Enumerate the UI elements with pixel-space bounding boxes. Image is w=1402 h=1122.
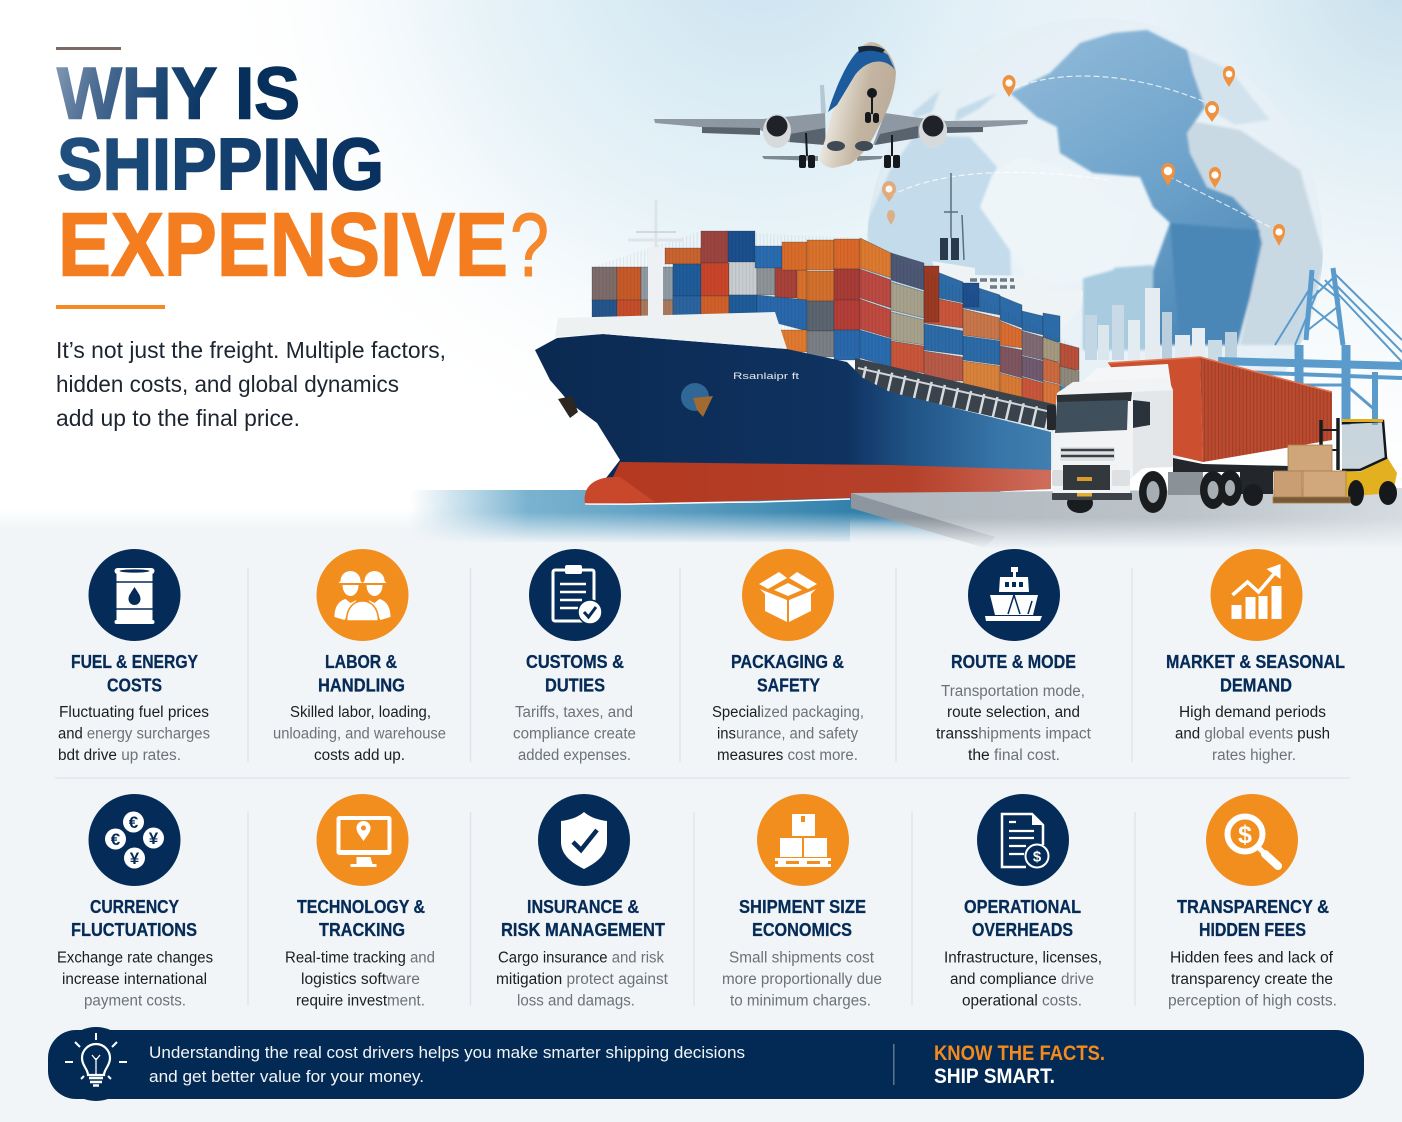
- icon: boxes on pallet: [757, 794, 849, 886]
- heading: [71, 896, 197, 940]
- engines: [763, 114, 947, 148]
- description: transparency create the: [1171, 971, 1333, 988]
- card: labor and handling: [273, 549, 446, 764]
- icon: open box: [742, 549, 834, 641]
- description: compliance create: [513, 726, 636, 742]
- footer message: Understanding the real cost drivers helps you make smarter shipping decisions: [149, 1043, 745, 1062]
- icon: two workers: [316, 549, 408, 641]
- heading: HANDLING: [318, 674, 405, 696]
- heading: [526, 651, 624, 696]
- icon: magnifier with dollar: [1206, 794, 1298, 886]
- title line: why is: WHY IS: [57, 54, 300, 134]
- wings: [654, 113, 1028, 145]
- footer call to action: [934, 1042, 1105, 1088]
- description: [944, 950, 1102, 1010]
- landing gear: [799, 88, 900, 168]
- illustration: forklift with boxes: [1273, 418, 1397, 506]
- container stacks, forward section: [592, 231, 860, 360]
- footer call to action: KNOW THE FACTS.: [934, 1042, 1105, 1065]
- description: [58, 704, 210, 764]
- heading: [71, 651, 199, 696]
- intro text: add up to the final price.: [56, 405, 300, 431]
- hull: [535, 334, 1051, 505]
- icon: currency coins: [88, 794, 180, 886]
- heading: SAFETY: [757, 674, 821, 696]
- shipping container trailer: [1108, 357, 1332, 462]
- title: [57, 54, 549, 296]
- heading: LABOR &: [325, 651, 397, 672]
- description: [1175, 704, 1330, 764]
- illustration: port crane: [1218, 268, 1402, 425]
- heading: FUEL & ENERGY: [71, 651, 199, 672]
- description: the final cost.: [968, 747, 1060, 764]
- container stacks, aft section: [860, 238, 1079, 412]
- description: [1168, 950, 1337, 1010]
- description: operational costs.: [962, 992, 1082, 1010]
- footer banner: [48, 1027, 1364, 1101]
- route lines: [890, 76, 1280, 232]
- top accent line: [56, 47, 121, 50]
- heading: TRANSPARENCY &: [1177, 896, 1329, 917]
- mast: [628, 200, 683, 337]
- description: rates higher.: [1212, 747, 1296, 764]
- card: insurance and risk management: [496, 794, 669, 1010]
- description: loss and damags.: [517, 992, 635, 1010]
- description: and global events push: [1175, 726, 1330, 742]
- title line: expensive: EXPENSIVE: [58, 196, 508, 296]
- heading: [1166, 651, 1345, 696]
- description: Exchange rate changes: [57, 950, 213, 966]
- heading: CUSTOMS &: [526, 651, 624, 672]
- ship name: Rsanlaipr ft: [733, 371, 799, 382]
- description: more proportionally due: [722, 971, 882, 988]
- description: Tariffs, taxes, and: [515, 704, 633, 721]
- description: Hidden fees and lack of: [1170, 950, 1334, 966]
- wheels: [1067, 470, 1263, 513]
- description: Skilled labor, loading,: [290, 704, 431, 721]
- heading: [1177, 896, 1329, 940]
- icon: currency coins: €: [129, 813, 139, 832]
- description: [513, 704, 636, 764]
- intro text: It’s not just the freight. Multiple factors,: [56, 337, 446, 363]
- heading: [964, 896, 1081, 940]
- description: increase international: [62, 971, 207, 988]
- chassis: [1168, 458, 1290, 495]
- heading: [731, 651, 844, 696]
- heading: COSTS: [107, 674, 162, 696]
- description: added expenses.: [518, 747, 631, 764]
- icon: monitor with pin: [316, 794, 408, 886]
- description: unloading, and warehouse: [273, 726, 446, 742]
- description: Real-time tracking and: [285, 950, 435, 966]
- card: fuel and energy costs: [58, 549, 210, 764]
- tailplane: [762, 156, 883, 161]
- description: mitigation protect against: [496, 971, 669, 988]
- description: payment costs.: [84, 992, 186, 1010]
- anchor and hawse: [558, 383, 713, 418]
- heading: TECHNOLOGY &: [297, 896, 425, 917]
- heading: DEMAND: [1220, 674, 1292, 696]
- heading: MARKET & SEASONAL: [1166, 651, 1345, 672]
- illustration: truck with container: [1047, 357, 1332, 513]
- description: Specialized packaging,: [712, 704, 864, 721]
- illustration: city skyline: [1085, 288, 1237, 360]
- icon: clipboard with check: [529, 549, 621, 641]
- deck pillars: [855, 358, 1079, 432]
- icon: light bulb: [59, 1027, 133, 1101]
- description: [712, 704, 864, 764]
- heading: [739, 896, 866, 940]
- description: High demand periods: [1179, 704, 1326, 721]
- icon: oil barrel: [88, 549, 180, 641]
- description: costs add up.: [314, 747, 405, 764]
- illustration: quay: [850, 488, 1402, 549]
- description: and energy surcharges: [58, 726, 210, 742]
- description: [936, 683, 1092, 764]
- heading: DUTIES: [545, 674, 605, 696]
- card: technology and tracking: [285, 794, 435, 1010]
- icon: document with dollar: [977, 794, 1069, 886]
- description: transshipments impact: [936, 726, 1092, 742]
- heading: [297, 896, 425, 940]
- description: perception of high costs.: [1168, 992, 1337, 1010]
- orange accent bar: [56, 305, 165, 309]
- icon: shield with check: [538, 794, 630, 886]
- description: [496, 950, 669, 1010]
- description: bdt drive up rates.: [58, 747, 181, 764]
- title question mark: ?: [510, 196, 549, 296]
- description: [57, 950, 213, 1010]
- forklift: [1321, 418, 1397, 506]
- heading: FLUCTUATIONS: [71, 919, 197, 940]
- card: operational overheads: [944, 794, 1102, 1010]
- description: to minimum charges.: [730, 992, 871, 1010]
- footer message: [149, 1043, 745, 1086]
- row dividers: [55, 568, 1350, 1006]
- icon: currency coins: €: [111, 830, 121, 849]
- blue livery: [828, 49, 895, 112]
- fuselage: [819, 42, 896, 168]
- description: insurance, and safety: [717, 726, 858, 742]
- card: market and seasonal demand: [1166, 549, 1345, 764]
- heading: PACKAGING &: [731, 651, 844, 672]
- illustration: container ship: [535, 200, 1079, 505]
- description: Small shipments cost: [729, 950, 875, 966]
- icon: magnifier with dollar: $: [1238, 821, 1252, 849]
- heading: CURRENCY: [90, 896, 180, 917]
- illustration: globe with route pins: [867, 18, 1325, 474]
- illustration: background vessel: [932, 173, 1083, 340]
- heading: TRACKING: [319, 919, 405, 940]
- card: packaging and safety: [712, 549, 864, 764]
- description: Fluctuating fuel prices: [59, 704, 209, 721]
- footer message: and get better value for your money.: [149, 1067, 424, 1086]
- truck cab: [1047, 364, 1173, 500]
- icon: ship: [968, 549, 1060, 641]
- illustration: sea: [410, 490, 1010, 544]
- ship superstructure deck: [555, 312, 787, 349]
- heading: OVERHEADS: [972, 919, 1073, 940]
- description: route selection, and: [947, 704, 1080, 721]
- card: shipment size economics: [722, 794, 882, 1010]
- red boot topping: [600, 462, 1051, 505]
- heading: [501, 896, 666, 940]
- icon: document with dollar: $: [1033, 848, 1042, 866]
- heading: ECONOMICS: [752, 919, 852, 940]
- bulbous bow: [585, 477, 655, 504]
- location pins: [882, 66, 1285, 246]
- description: require investment.: [296, 992, 425, 1010]
- description: and compliance drive: [950, 971, 1094, 988]
- card: currency fluctuations: [57, 794, 213, 1010]
- bow foam: [585, 499, 850, 504]
- heading: [318, 651, 405, 696]
- description: [273, 704, 446, 764]
- heading: HIDDEN FEES: [1199, 919, 1306, 940]
- description: Cargo insurance and risk: [498, 950, 664, 966]
- icon: currency coins: ¥: [130, 849, 140, 868]
- card: transparency and hidden fees: [1168, 794, 1337, 1010]
- title line: shipping: SHIPPING: [57, 124, 384, 206]
- card: customs and duties: [513, 549, 636, 764]
- heading: INSURANCE &: [527, 896, 639, 917]
- description: logistics software: [301, 971, 420, 988]
- description: [285, 950, 435, 1010]
- cardboard boxes: [1273, 445, 1350, 503]
- illustration: airplane: [654, 42, 1028, 168]
- heading: RISK MANAGEMENT: [501, 919, 666, 940]
- intro text: [56, 337, 446, 431]
- heading: ROUTE & MODE: [951, 651, 1076, 672]
- description: [722, 950, 882, 1010]
- description: measures cost more.: [717, 747, 858, 764]
- intro text: hidden costs, and global dynamics: [56, 371, 399, 397]
- icon: growth chart: [1210, 549, 1302, 641]
- description: Infrastructure, licenses,: [944, 950, 1102, 966]
- footer call to action: SHIP SMART.: [934, 1065, 1055, 1088]
- heading: OPERATIONAL: [964, 896, 1081, 917]
- heading: SHIPMENT SIZE: [739, 896, 866, 917]
- card: route and mode: [936, 549, 1092, 764]
- icon: currency coins: ¥: [149, 829, 159, 848]
- description: Transportation mode,: [941, 683, 1085, 700]
- panel: hero scene background: [0, 0, 1402, 530]
